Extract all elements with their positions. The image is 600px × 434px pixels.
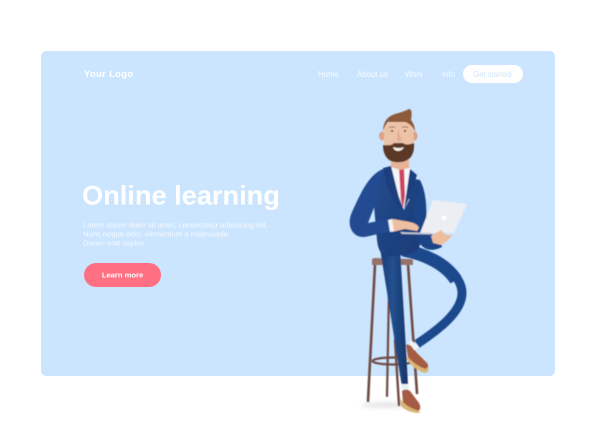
navigation menu: Info [442, 70, 456, 79]
standing leg [380, 248, 408, 384]
navigation menu: About us [357, 70, 388, 79]
navigation menu [318, 70, 456, 79]
body text [83, 220, 268, 248]
hero panel [41, 51, 555, 376]
eyes and brows [389, 127, 408, 141]
laptop [400, 200, 467, 234]
get started button: Get started [473, 70, 512, 79]
hair [383, 109, 415, 132]
body text: Lorem ipsum dolor sit amet, consectetur adipiscing elit. [83, 220, 268, 230]
suit torso [373, 169, 425, 257]
body text: Donec erat sapien [83, 238, 145, 248]
lower sock [401, 380, 409, 392]
learn more button [84, 263, 161, 287]
ears [379, 132, 418, 140]
lower shoe [400, 390, 420, 413]
learn more button: Learn more [102, 270, 143, 280]
smile [393, 147, 404, 151]
face [384, 122, 414, 160]
body text: Nunc neque odio, elementum a malesuada. [83, 230, 230, 238]
logo: Your Logo [84, 69, 134, 80]
navigation menu: Home [318, 70, 339, 79]
get started button [463, 65, 523, 83]
raised shoe [406, 340, 429, 373]
neck [391, 155, 409, 170]
floor shadow [361, 402, 409, 408]
navigation menu: Work [405, 70, 423, 79]
stool [368, 258, 417, 405]
beard [383, 143, 414, 162]
crossed leg [403, 250, 462, 344]
hand on keyboard [388, 219, 419, 232]
character on stool [350, 109, 467, 413]
shirt and tie [383, 166, 417, 210]
left arm [350, 169, 391, 237]
right arm [414, 180, 442, 250]
hand under laptop [431, 230, 453, 245]
title: Online learning [82, 180, 280, 210]
